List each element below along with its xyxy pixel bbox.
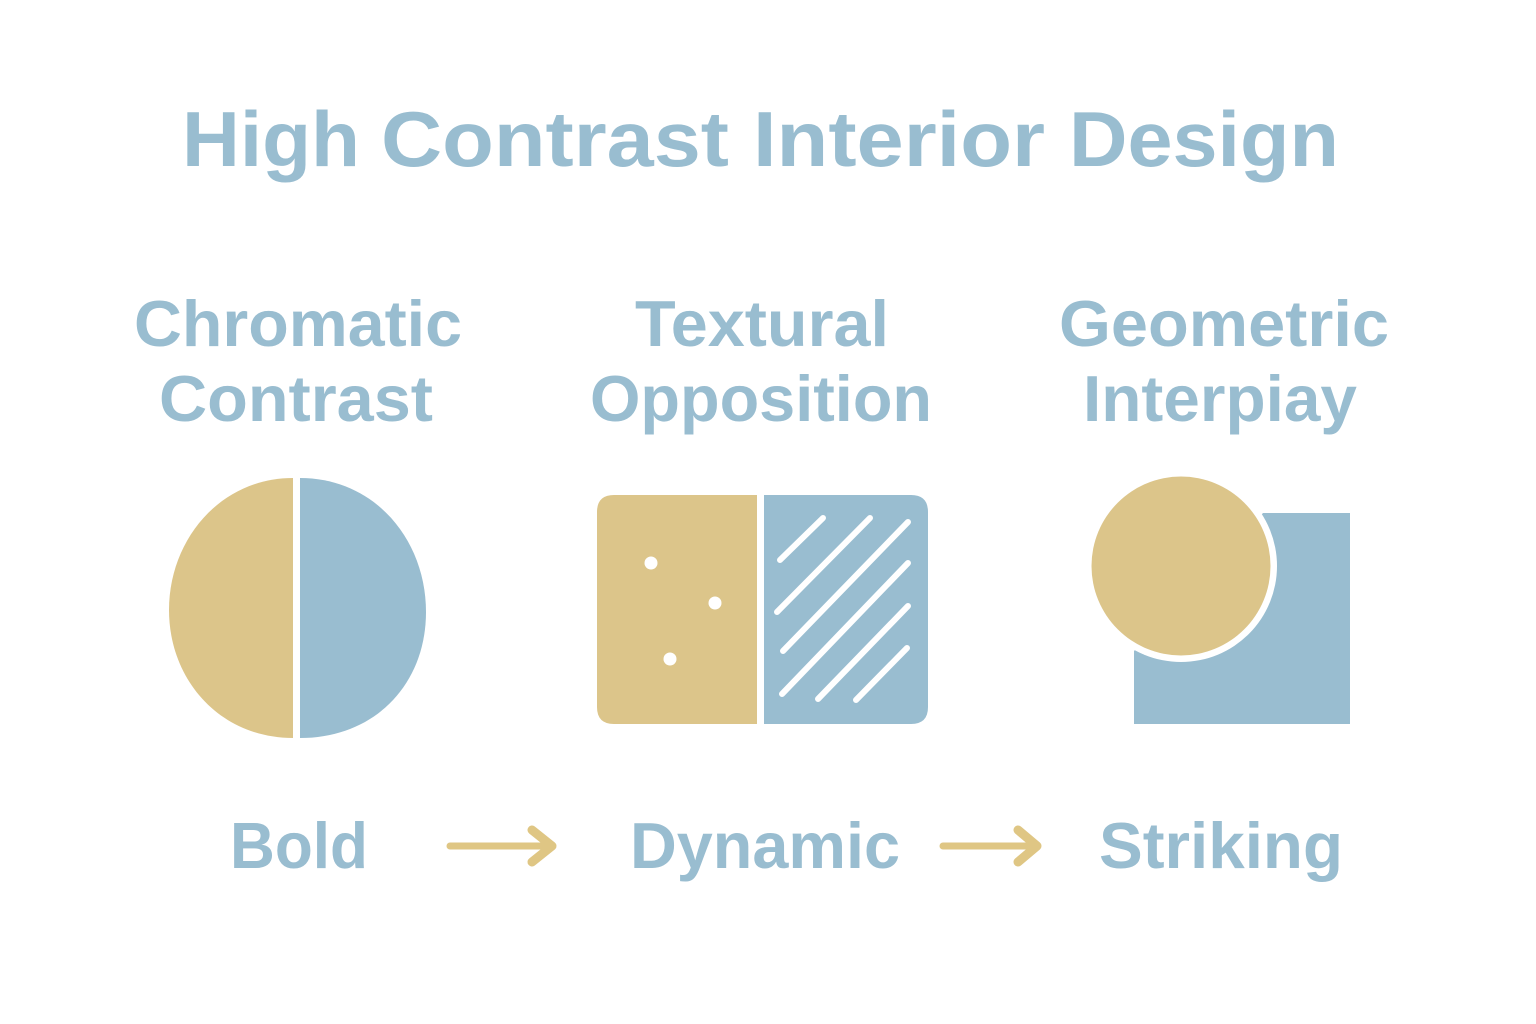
- heading: Chromatic Contrast: Chromatic: [134, 287, 462, 360]
- heading: Chromatic Contrast: Contrast: [159, 362, 433, 435]
- label: Dynamic: Dynamic: [630, 809, 900, 882]
- icon: circle over square: [1085, 470, 1350, 724]
- heading: Chromatic Contrast: [134, 287, 462, 435]
- title: Contrast: [381, 95, 729, 183]
- arrow: Bold to Dynamic: [450, 830, 552, 862]
- heading: Textural Opposition: [590, 287, 932, 435]
- label: Striking: Striking: [1099, 809, 1343, 882]
- heading: Geometric Interplay: [1059, 287, 1389, 435]
- arrow: Dynamic to Striking: [943, 830, 1037, 862]
- heading: Textural Opposition: Textural: [635, 287, 889, 360]
- icon: split circle: [169, 478, 426, 738]
- title: Design: [1069, 95, 1339, 183]
- label: Bold: Bold: [230, 809, 368, 882]
- heading: Geometric Interplay: Interpiay: [1083, 362, 1357, 435]
- title: High: [182, 95, 360, 183]
- icon: textured panels: [597, 495, 928, 724]
- heading: Textural Opposition: Opposition: [590, 362, 932, 435]
- heading: Geometric Interplay: Geometric: [1059, 287, 1389, 360]
- title: Interior: [753, 95, 1045, 183]
- title: [182, 95, 1339, 183]
